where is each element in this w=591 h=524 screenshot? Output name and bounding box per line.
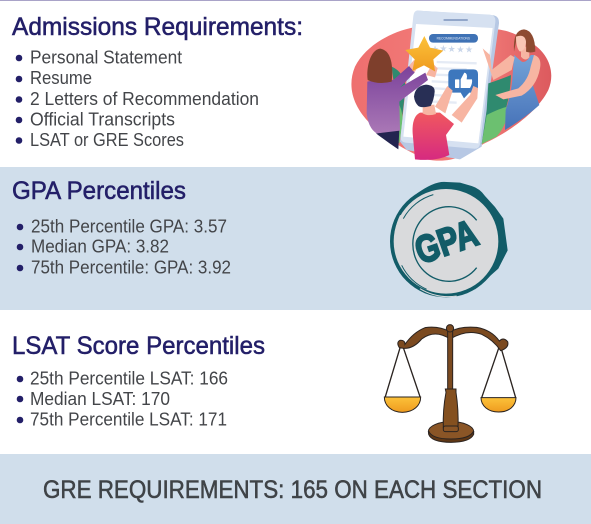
stamp text: GPA xyxy=(410,212,483,273)
recommendations badge: RECOMMENDATIONS xyxy=(437,37,470,41)
thumbs up card xyxy=(448,69,478,98)
panel: GRE requirements banner xyxy=(0,454,591,524)
banner text: GRE REQUIREMENTS: 165 ON EACH SECTION xyxy=(43,476,542,504)
rating stars: ★ xyxy=(465,45,473,55)
list: admissions items: 2 Letters of Recommendation xyxy=(30,88,259,109)
heading: admissions requirements: Admissions Requirements: xyxy=(12,13,303,41)
list: admissions items: Personal Statement xyxy=(30,46,182,68)
rating stars xyxy=(431,43,473,55)
woman right xyxy=(483,29,540,130)
plant left xyxy=(389,67,406,143)
panel: GPA percentiles xyxy=(0,167,591,310)
woman left xyxy=(367,49,438,149)
list: GPA values: 75th Percentile: GPA: 3.92 xyxy=(31,256,231,278)
list: admissions items xyxy=(16,46,259,150)
icon: GPA stamp xyxy=(390,182,508,297)
rating stars: ★ xyxy=(448,44,456,54)
rating stars: ★ xyxy=(439,43,447,53)
list: LSAT values: 25th Percentile LSAT: 166 xyxy=(30,368,228,388)
list: GPA values: Median GPA: 3.82 xyxy=(31,236,169,256)
list: LSAT values xyxy=(17,368,228,430)
blob background xyxy=(351,27,551,161)
star xyxy=(405,36,443,71)
list: admissions items: LSAT or GRE Scores xyxy=(30,129,184,150)
heading: GPA percentiles: GPA Percentiles xyxy=(12,177,186,205)
panel: admissions requirements xyxy=(0,0,591,167)
list: GPA values: 25th Percentile GPA: 3.57 xyxy=(31,216,227,236)
man centre xyxy=(413,85,478,160)
list: admissions items: Official Transcripts xyxy=(30,108,175,130)
heading: LSAT score percentiles: LSAT Score Percentiles xyxy=(12,332,265,360)
rating stars: ★ xyxy=(431,44,439,54)
phone xyxy=(400,11,499,159)
list: admissions items: Resume xyxy=(30,67,92,88)
list: LSAT values: Median LSAT: 170 xyxy=(30,388,170,409)
list: GPA values xyxy=(17,216,231,278)
illustration: people reviewing recommendations on a phone xyxy=(351,11,551,161)
recommendations badge xyxy=(429,34,478,43)
list: LSAT values: 75th Percentile LSAT: 171 xyxy=(30,408,227,430)
panel: LSAT score percentiles xyxy=(0,310,591,454)
plant right xyxy=(482,75,511,144)
icon: scales of justice xyxy=(384,325,516,442)
rating stars: ★ xyxy=(456,44,464,54)
